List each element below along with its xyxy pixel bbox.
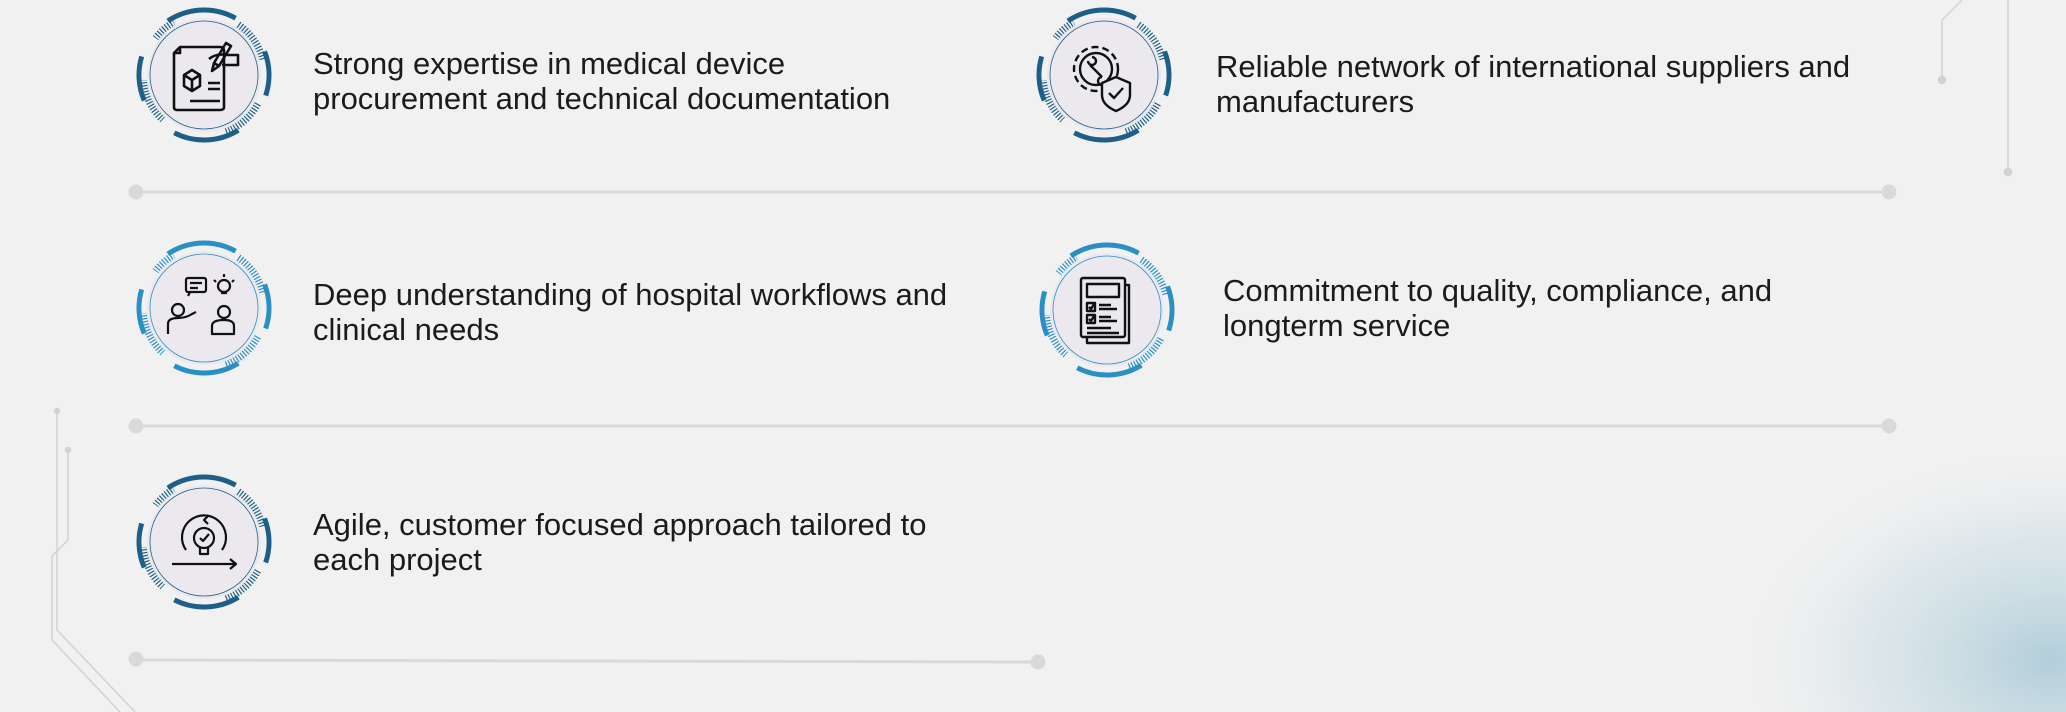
text: procurement expertise: Strong expertise in medical device xyxy=(313,46,785,81)
icon: people discussion xyxy=(115,219,293,397)
icon: gear with shield xyxy=(1015,0,1193,164)
text: procurement expertise: procurement and technical documentation xyxy=(313,81,890,116)
icon: agile cycle xyxy=(115,453,293,631)
background glow xyxy=(1730,440,2066,712)
text: agile approach: Agile, customer focused approach tailored to xyxy=(313,507,926,542)
text: agile approach: each project xyxy=(313,542,482,577)
dividers xyxy=(130,186,1895,668)
text: quality commitment: Commitment to quality, compliance, and xyxy=(1223,273,1772,308)
text: supplier network: manufacturers xyxy=(1216,84,1414,119)
icon: document signing xyxy=(115,0,293,164)
icon: checklist document xyxy=(1018,221,1196,399)
text: quality commitment xyxy=(1223,273,1772,343)
text: quality commitment: longterm service xyxy=(1223,308,1450,343)
text: agile approach xyxy=(313,507,926,577)
text: supplier network xyxy=(1216,49,1850,119)
circuit lines right xyxy=(1938,0,2012,176)
text: hospital workflows: clinical needs xyxy=(313,312,499,347)
text: hospital workflows xyxy=(313,277,947,347)
text: procurement expertise xyxy=(313,46,890,116)
circuit lines left xyxy=(52,408,135,712)
text: supplier network: Reliable network of international suppliers and xyxy=(1216,49,1850,84)
text: hospital workflows: Deep understanding of hospital workflows and xyxy=(313,277,947,312)
